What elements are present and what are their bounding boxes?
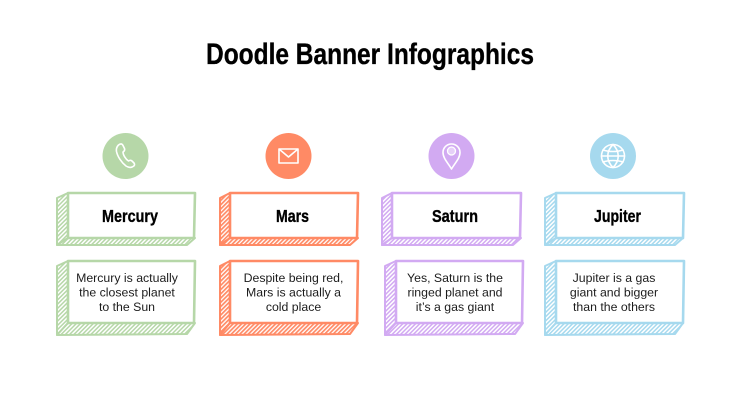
text: Mercury description: to the Sun [99, 300, 155, 314]
heading: Saturn: Saturn [432, 206, 478, 226]
icon: envelope [266, 133, 312, 179]
panel: Jupiter [545, 133, 684, 335]
banner: Mercury description [57, 261, 195, 335]
text: Mars description: Despite being red, [244, 271, 343, 285]
heading: Mercury: Mercury [102, 206, 158, 226]
text: Jupiter description: than the others [573, 300, 655, 314]
text: Jupiter description: giant and bigger [570, 286, 658, 300]
banner: Jupiter heading [545, 193, 684, 245]
heading: Jupiter: Jupiter [594, 206, 641, 226]
banner: Mars heading [220, 193, 358, 245]
panel: Saturn [382, 133, 523, 335]
text: Saturn description: Yes, Saturn is the [407, 271, 503, 285]
title: Doodle Banner Infographics [206, 38, 534, 71]
banner: Jupiter description [545, 261, 684, 335]
text: Saturn description: it’s a gas giant [416, 300, 495, 314]
panel: Mercury [57, 133, 195, 335]
banner: Mars description [220, 261, 358, 335]
icon: phone [102, 133, 148, 179]
text: Saturn description: ringed planet and [407, 286, 503, 300]
text: Jupiter description: Jupiter is a gas [573, 271, 655, 285]
panel: Mars [220, 133, 358, 335]
text: Mercury description: the closest planet [79, 286, 175, 300]
icon: map pin [428, 133, 474, 179]
banner: Mercury heading [57, 193, 195, 245]
banner: Saturn description [385, 261, 523, 335]
icon: globe [590, 133, 636, 179]
banner: Saturn heading [382, 193, 521, 245]
text: Mars description: cold place [266, 300, 321, 314]
text: Mars description: Mars is actually a [246, 286, 341, 300]
text: Mercury description: Mercury is actually [76, 271, 179, 285]
heading: Mars: Mars [276, 206, 309, 226]
